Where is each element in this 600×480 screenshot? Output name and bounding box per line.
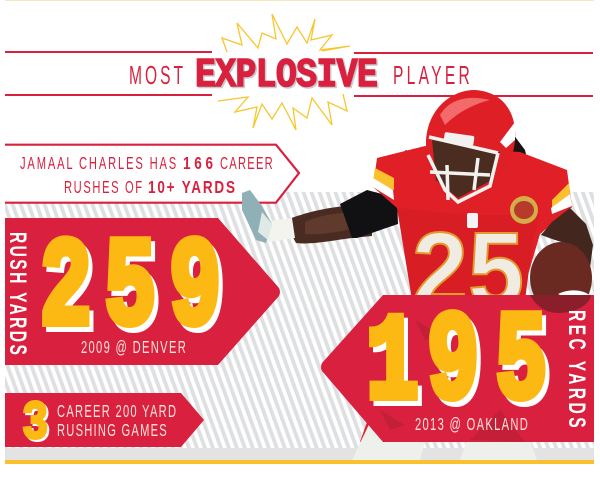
legs <box>352 418 537 460</box>
title <box>129 53 470 100</box>
right arm and football <box>530 208 593 314</box>
jersey <box>360 146 572 442</box>
label: rec yards: REC YARDS <box>563 310 589 428</box>
hair <box>405 130 530 190</box>
panel: rec yards <box>321 289 594 442</box>
text: career 200 yard rushing games: RUSHING GAMES <box>57 420 167 441</box>
number: 259: 5 <box>106 215 154 349</box>
callout: 166 career rushes <box>5 145 299 203</box>
number: 3: 3 <box>25 394 50 452</box>
number: 195: 9 <box>429 289 477 423</box>
label: rush yards: RUSH YARDS <box>4 232 30 355</box>
callout: 166 career rushes: 166 <box>183 154 213 174</box>
striped background band <box>5 192 594 464</box>
label: 2013 at Oakland: 2013 @ OAKLAND <box>415 414 528 435</box>
jersey number: 25 <box>412 211 524 329</box>
number: 195: 9 <box>433 294 481 428</box>
title: EXPLOSIVE <box>196 54 379 100</box>
title: EXPLOSIVE <box>195 53 378 99</box>
player photo illustration <box>242 90 593 460</box>
number: 259: 9 <box>175 220 223 354</box>
panel: rush yards <box>4 215 280 365</box>
number: 195: 1 <box>366 296 419 434</box>
panel: 200 yard games <box>5 392 204 452</box>
number: 259 <box>42 215 223 354</box>
text: career 200 yard rushing games <box>57 401 176 441</box>
title: MOST <box>129 61 183 90</box>
callout: 166 career rushes: 10+ YARDS <box>148 178 235 198</box>
icon: starburst <box>218 14 350 130</box>
text: career 200 yard rushing games: CAREER 200 YARD <box>57 401 176 422</box>
title: PLAYER <box>393 61 470 90</box>
number: 195: 5 <box>501 294 549 428</box>
number: 195 <box>366 289 549 439</box>
arm, wrist tape and glove <box>242 190 398 243</box>
number: 195: 1 <box>370 301 423 439</box>
number: 259: 5 <box>110 220 158 354</box>
title rules <box>5 51 593 97</box>
callout: 166 career rushes: CAREER <box>220 153 273 174</box>
number: 259: 2 <box>46 220 94 354</box>
label: 2009 at Denver: 2009 @ DENVER <box>81 337 186 358</box>
number: 259: 2 <box>42 215 90 349</box>
callout: 166 career rushes: JAMAAL CHARLES HAS <box>20 153 176 174</box>
helmet <box>426 90 515 204</box>
number: 259: 9 <box>171 215 219 349</box>
number: 195: 5 <box>497 289 545 423</box>
callout: 166 career rushes: RUSHES OF <box>64 177 142 198</box>
number: 3: 3 <box>23 392 48 450</box>
